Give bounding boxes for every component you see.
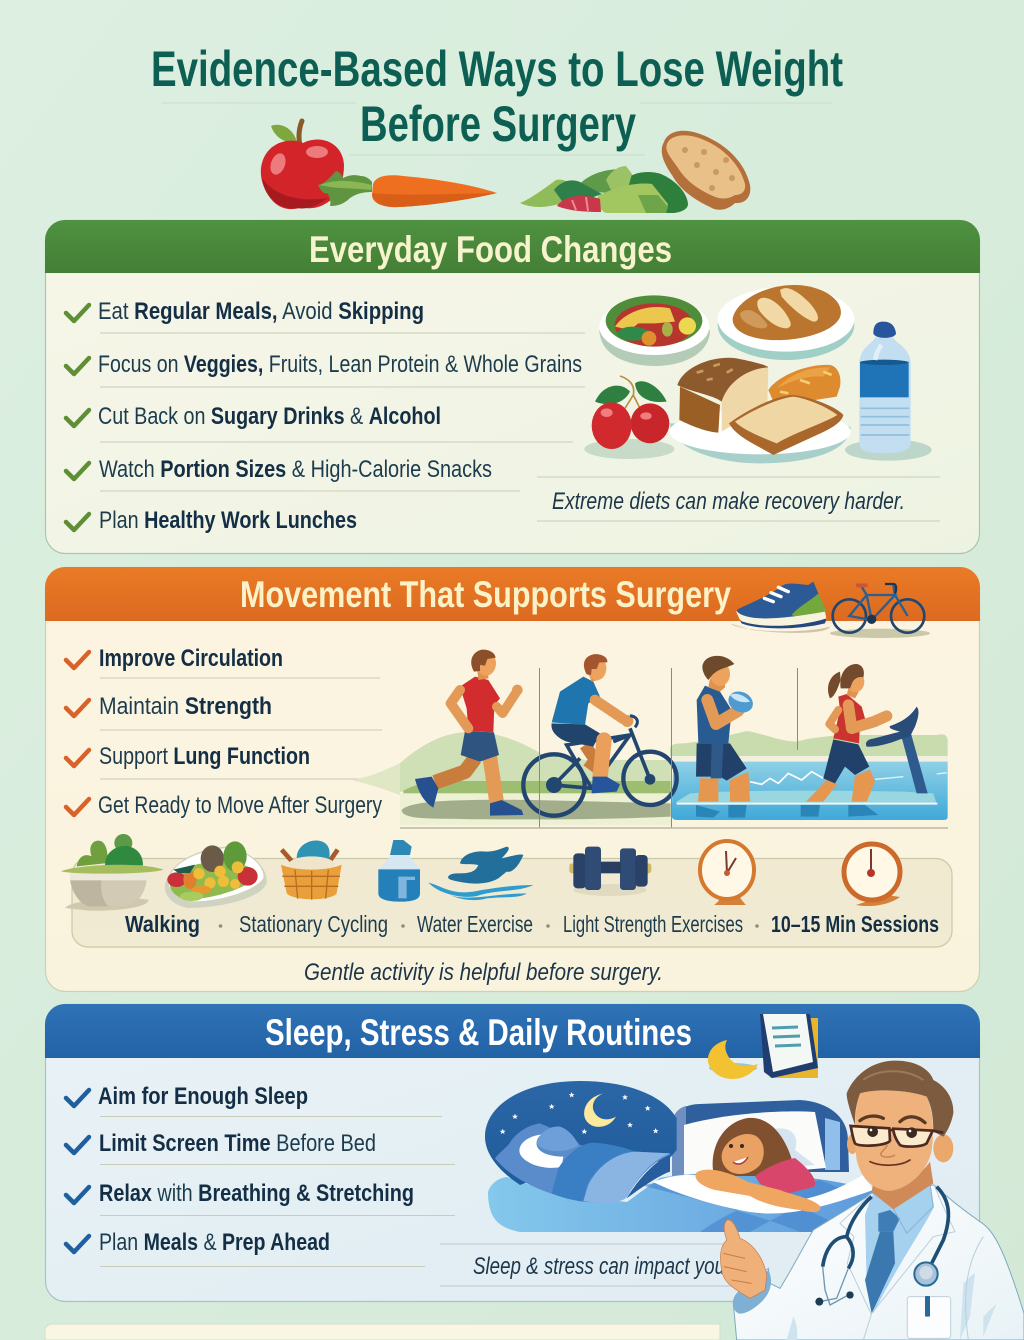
blanket [488, 1173, 873, 1232]
glasses [851, 1126, 943, 1147]
title: Before Surgery [360, 96, 636, 152]
list item: portion sizes: Watch Portion Sizes & High-Calorie Snacks [99, 456, 492, 483]
callout: extreme diets [537, 477, 940, 521]
illustration: foods and water [584, 285, 932, 463]
hills and ground [400, 732, 671, 825]
caption: gentle activity: Gentle activity is helpful before surgery. [304, 959, 663, 986]
header bar: movement [45, 567, 980, 621]
header bar: sleep [45, 1004, 980, 1058]
thumbs up hand [720, 1220, 767, 1298]
icon: salad bowl [599, 295, 710, 366]
header icons: shoe and bike [730, 582, 930, 638]
list item: lung: Support Lung Function [99, 743, 310, 770]
panel: everyday food changes [45, 220, 980, 554]
icon: bread loaf plate [669, 358, 851, 463]
stethoscope [815, 1187, 948, 1306]
heading: food: Everyday Food Changes [309, 229, 672, 270]
icon: plant bowl [61, 834, 163, 911]
icon: salad plate [165, 841, 267, 908]
icon: water bottle small [378, 840, 420, 902]
title [151, 41, 843, 152]
caption: sleep and stress: Sleep & stress can impact you [473, 1253, 725, 1280]
neck [872, 1162, 933, 1209]
icon: water bottle [845, 322, 932, 461]
figure: water walker [696, 656, 756, 818]
activity labels: Water Exercise [417, 911, 533, 937]
activity labels: Stationary Cycling [239, 911, 388, 937]
list item: strength: Maintain Strength [99, 693, 272, 720]
icon: apple [261, 121, 344, 209]
icons row: bottle swimmer dumbbell [378, 840, 651, 902]
coat [733, 1185, 1024, 1340]
caption lines: sleep [440, 1244, 735, 1286]
headboard and pillow [672, 1100, 849, 1182]
figure: cyclist [523, 654, 677, 816]
activity labels [125, 911, 939, 937]
illustration: exercise scene [400, 650, 948, 828]
figure: treadmill walker [801, 664, 928, 817]
list item: relax: Relax with Breathing & Stretching [99, 1180, 414, 1207]
icon: clock one [700, 841, 754, 905]
icon: salad [520, 166, 688, 213]
icons row: left foods [61, 834, 342, 911]
night sky [485, 1081, 677, 1203]
icon: clipboard [760, 1014, 818, 1078]
dividers between activities [540, 668, 798, 828]
heading: movement: Movement That Supports Surgery [240, 574, 731, 615]
hill edge behind the list [352, 763, 400, 795]
panel: partially visible next section [45, 1324, 720, 1340]
doctor character [720, 1061, 1024, 1340]
water scene [670, 656, 948, 820]
icon: bread slice [662, 131, 750, 210]
icon: crescent moon [708, 1040, 758, 1079]
panel: sleep and stress [45, 1004, 980, 1302]
panel: movement [45, 567, 980, 992]
icon: swimmer [428, 847, 533, 900]
sheet [653, 1175, 873, 1213]
duvet folds [495, 1123, 670, 1203]
list item: sugary drinks: Cut Back on Sugary Drinks & Alcohol [98, 403, 441, 430]
figure: runner [415, 650, 523, 816]
icon: basket [281, 840, 342, 900]
label strip [72, 858, 952, 947]
list item: veggies: Focus on Veggies, Fruits, Lean Protein & Whole Grains [98, 351, 582, 378]
list item: move after surgery: Get Ready to Move After Surgery [98, 792, 382, 819]
icon: clock two [844, 844, 900, 906]
icon: bicycle [830, 583, 930, 638]
list item: circulation: Improve Circulation [99, 645, 283, 672]
icon: sneaker [730, 582, 830, 633]
callout: extreme diets: Extreme diets can make recovery harder. [552, 488, 905, 515]
heading: sleep: Sleep, Stress & Daily Routines [265, 1012, 692, 1053]
shirt and tie [840, 1183, 955, 1340]
list item: regular meals: Eat Regular Meals, Avoid Skipping [98, 298, 424, 325]
list item: work lunches: Plan Healthy Work Lunches [99, 507, 357, 534]
activity labels: Light Strength Exercises [563, 911, 743, 937]
list item: screen time: Limit Screen Time Before Bed [99, 1130, 376, 1157]
head [847, 1061, 953, 1191]
list item: plan meals: Plan Meals & Prep Ahead [99, 1229, 330, 1256]
illustration: night bed [485, 1081, 873, 1232]
activity labels: 10–15 Min Sessions [771, 911, 939, 937]
list item: sleep: Aim for Enough Sleep [98, 1083, 308, 1110]
icon: carrot [318, 171, 497, 207]
header bar: food [45, 220, 980, 273]
icon: bread on plate [718, 285, 854, 360]
sleeping woman [696, 1118, 820, 1212]
icon: cherries [584, 376, 674, 459]
icon: dumbbell [569, 847, 651, 896]
activity labels: Walking [125, 911, 200, 937]
hills and pool [670, 731, 948, 820]
running and cycling scene [400, 650, 677, 825]
